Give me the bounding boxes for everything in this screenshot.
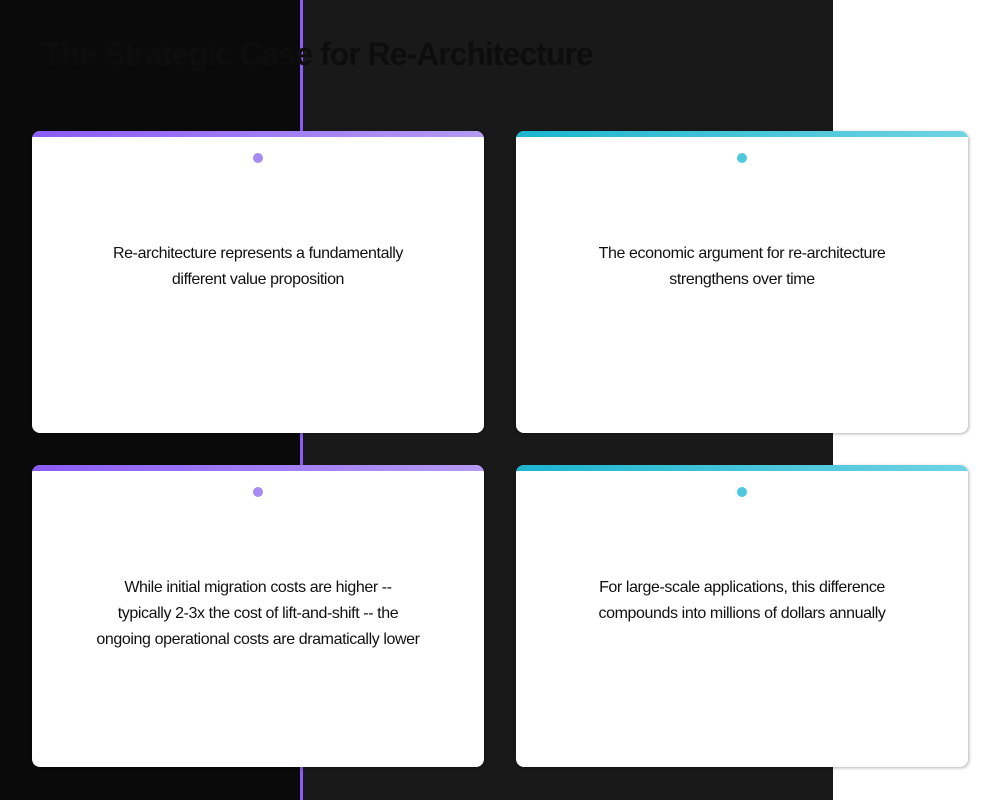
card: economic argument [516,131,968,433]
card: large-scale applications [516,465,968,767]
card text: strengthens over time [669,271,815,288]
card: migration costs [32,465,484,767]
card text [113,245,404,288]
card text: different value proposition [172,271,344,288]
card text: For large-scale applications, this difference [599,579,885,596]
icon: dot [737,153,747,163]
card text [599,245,886,288]
icon: dot [253,487,263,497]
card text: The economic argument for re-architecture [599,245,885,262]
card text: ongoing operational costs are dramatically lower [96,631,420,648]
card text: Re-architecture represents a fundamentally [113,245,403,262]
title: The Strategic Case for Re-Architecture [42,36,593,72]
card text: typically 2-3x the cost of lift-and-shift -- the [118,605,398,622]
icon: dot [737,487,747,497]
icon: dot [253,153,263,163]
card text: compounds into millions of dollars annually [599,605,885,622]
card text [96,579,420,648]
card: value proposition [32,131,484,433]
card text: While initial migration costs are higher -- [124,579,392,596]
card text [599,579,886,622]
